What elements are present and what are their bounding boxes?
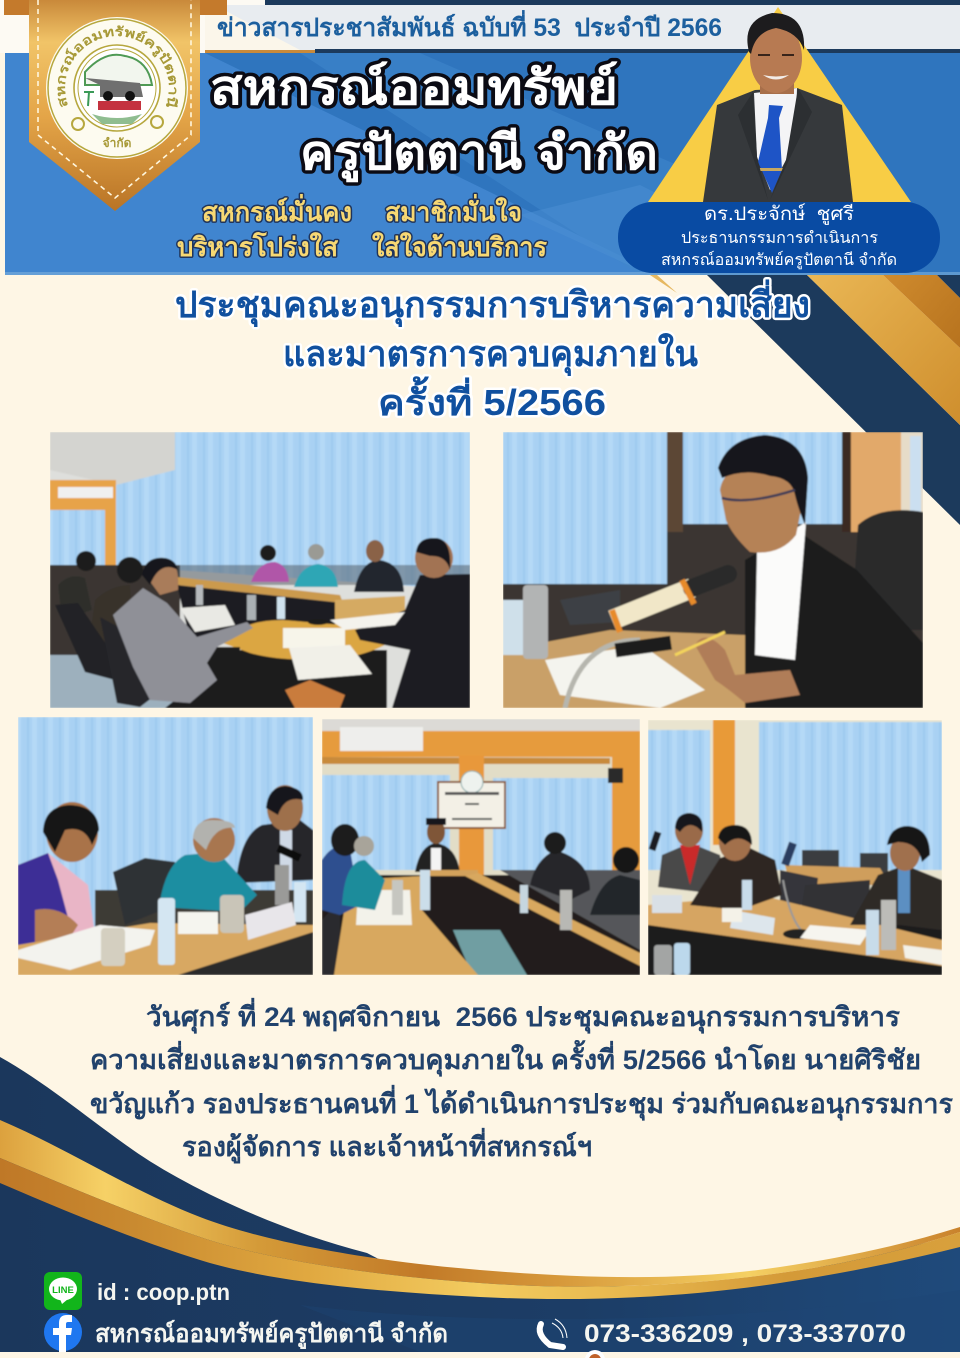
- glasses: [722, 490, 795, 500]
- name plate pill: ดร.ประจักษ์ ชูศรี: [704, 203, 854, 225]
- face: [750, 23, 802, 93]
- meeting heading: ประชุมคณะอนุกรรมการบริหารความเสี่ยง: [175, 279, 810, 328]
- shirt: [754, 88, 797, 190]
- header band: [0, 0, 960, 275]
- ribbon tabs: [4, 0, 30, 15]
- left man: [18, 853, 95, 950]
- LINE id: id : coop.ptn: [97, 1279, 230, 1305]
- left men: [58, 576, 92, 620]
- body paragraph: ขวัญแก้ว รองประธานคนที่ 1 ได้ดำเนินการประชุม ร่วมกับคณะอนุกรรมการ: [90, 1084, 953, 1121]
- Facebook page name: สหกรณ์ออมทรัพย์ครูปัตตานี จำกัด: [95, 1319, 448, 1350]
- right table: [465, 873, 640, 966]
- back table: [422, 870, 478, 876]
- man with red shirt: [658, 843, 725, 895]
- slogans: [177, 193, 547, 262]
- photo 4: meeting room overview: [322, 719, 640, 975]
- name plate pill: สหกรณ์ออมทรัพย์ครูปัตตานี จำกัด: [661, 250, 897, 270]
- yellow triangle: [648, 7, 911, 202]
- neck: [760, 78, 794, 94]
- header blue panel: [5, 53, 960, 275]
- shirt: [755, 522, 806, 660]
- speaker jacket: [745, 530, 923, 708]
- slogans: สหกรณ์มั่นคง: [202, 193, 352, 227]
- phone numbers: 073-336209 , 073-337070: [584, 1320, 906, 1348]
- middle man: [690, 848, 782, 910]
- icon: LINE: [44, 1272, 82, 1310]
- dark trousers: [165, 647, 240, 708]
- papers: [545, 645, 705, 708]
- footer base strip dot: [0, 1350, 960, 1358]
- president portrait: [648, 7, 911, 202]
- suit: [703, 88, 853, 202]
- carpet: [453, 930, 527, 975]
- top-right diagonal stripes: [650, 275, 960, 525]
- chairs: [55, 603, 115, 680]
- right man: [355, 574, 470, 708]
- body paragraph: ความเสี่ยงและมาตรการควบคุมภายใน ครั้งที่ 5/2566 นำโดย นายศิริชัย: [90, 1039, 921, 1077]
- name plate pill: ประธานกรรมการดำเนินการ: [681, 230, 878, 247]
- hair: [747, 13, 804, 54]
- papers: [283, 628, 345, 648]
- middle man: [159, 852, 257, 912]
- left people: [322, 847, 360, 915]
- table: [503, 630, 800, 708]
- thermos: [523, 585, 548, 659]
- slogans: บริหารโปร่งใส: [177, 231, 338, 262]
- hands: [695, 638, 800, 703]
- photo 1: committee round table: [50, 432, 470, 708]
- bottom navy curve panel: [0, 1057, 960, 1352]
- slogans: ใส่ใจด้านบริการ: [372, 232, 547, 262]
- right man: [236, 820, 313, 883]
- issue line: ข่าวสารประชาสัมพันธ์ ฉบับที่ 53 ประจำปี 2566: [217, 10, 722, 42]
- lapels: [738, 88, 812, 200]
- photo 2: speaker with microphone: [503, 432, 923, 708]
- gold swoosh: [0, 1120, 960, 1299]
- photo 3: three committee members: [18, 717, 313, 975]
- icon: telephone: [540, 1319, 567, 1347]
- desk bottles: [420, 870, 430, 910]
- logo seal: [46, 17, 188, 159]
- sign board: [438, 782, 505, 828]
- slogans: สมาชิกมั่นใจ: [385, 193, 522, 227]
- logo seal: จำกัด: [103, 136, 132, 150]
- logo seal: สหกรณ์ออมทรัพย์ครูปัตตานี: [57, 25, 178, 108]
- face: [720, 462, 802, 553]
- left table: [334, 876, 478, 975]
- organisation title: ครูปัตตานี จำกัด: [300, 127, 658, 183]
- icon: Facebook: [44, 1313, 82, 1352]
- ribbon banner with logo: [4, 0, 227, 211]
- bottles: [158, 898, 175, 965]
- plates, boxes, bottles: [652, 895, 682, 913]
- chair man: [415, 843, 460, 872]
- books: [285, 680, 345, 708]
- eyes: [758, 54, 794, 56]
- meeting heading: และมาตรการควบคุมภายใน: [283, 332, 698, 377]
- table dark base: [322, 875, 640, 975]
- right woman: [850, 865, 942, 930]
- hair: [718, 435, 808, 525]
- name plate pill: [618, 202, 940, 273]
- table: [648, 925, 942, 975]
- microphone: [565, 574, 728, 708]
- microphones: [652, 832, 658, 850]
- meeting heading: ครั้งที่ 5/2566: [378, 376, 606, 423]
- body paragraph: [90, 997, 953, 1164]
- ribbon body: [29, 0, 200, 211]
- right people: [530, 850, 590, 900]
- photo 5: table side view: [648, 720, 942, 975]
- header top strip: [0, 0, 960, 53]
- back row people: [251, 540, 404, 592]
- grey-jacket man: [113, 588, 253, 703]
- bottles: [247, 595, 256, 620]
- body paragraph: รองผู้จัดการ และเจ้าหน้าที่สหกรณ์ฯ: [182, 1127, 592, 1164]
- back chairs: [802, 850, 839, 870]
- body paragraph: วันศุกร์ ที่ 24 พฤศจิกายน 2566 ประชุมคณะอนุกรรมการบริหาร: [146, 997, 901, 1034]
- organisation title: [210, 61, 658, 183]
- tie: [758, 105, 783, 193]
- organisation title: สหกรณ์ออมทรัพย์: [210, 61, 618, 115]
- table: [18, 923, 313, 975]
- icon: LINE: LINE: [52, 1285, 74, 1296]
- smile: [763, 75, 789, 80]
- lower-right lighter wave: [300, 1290, 960, 1352]
- meeting heading: [175, 279, 810, 423]
